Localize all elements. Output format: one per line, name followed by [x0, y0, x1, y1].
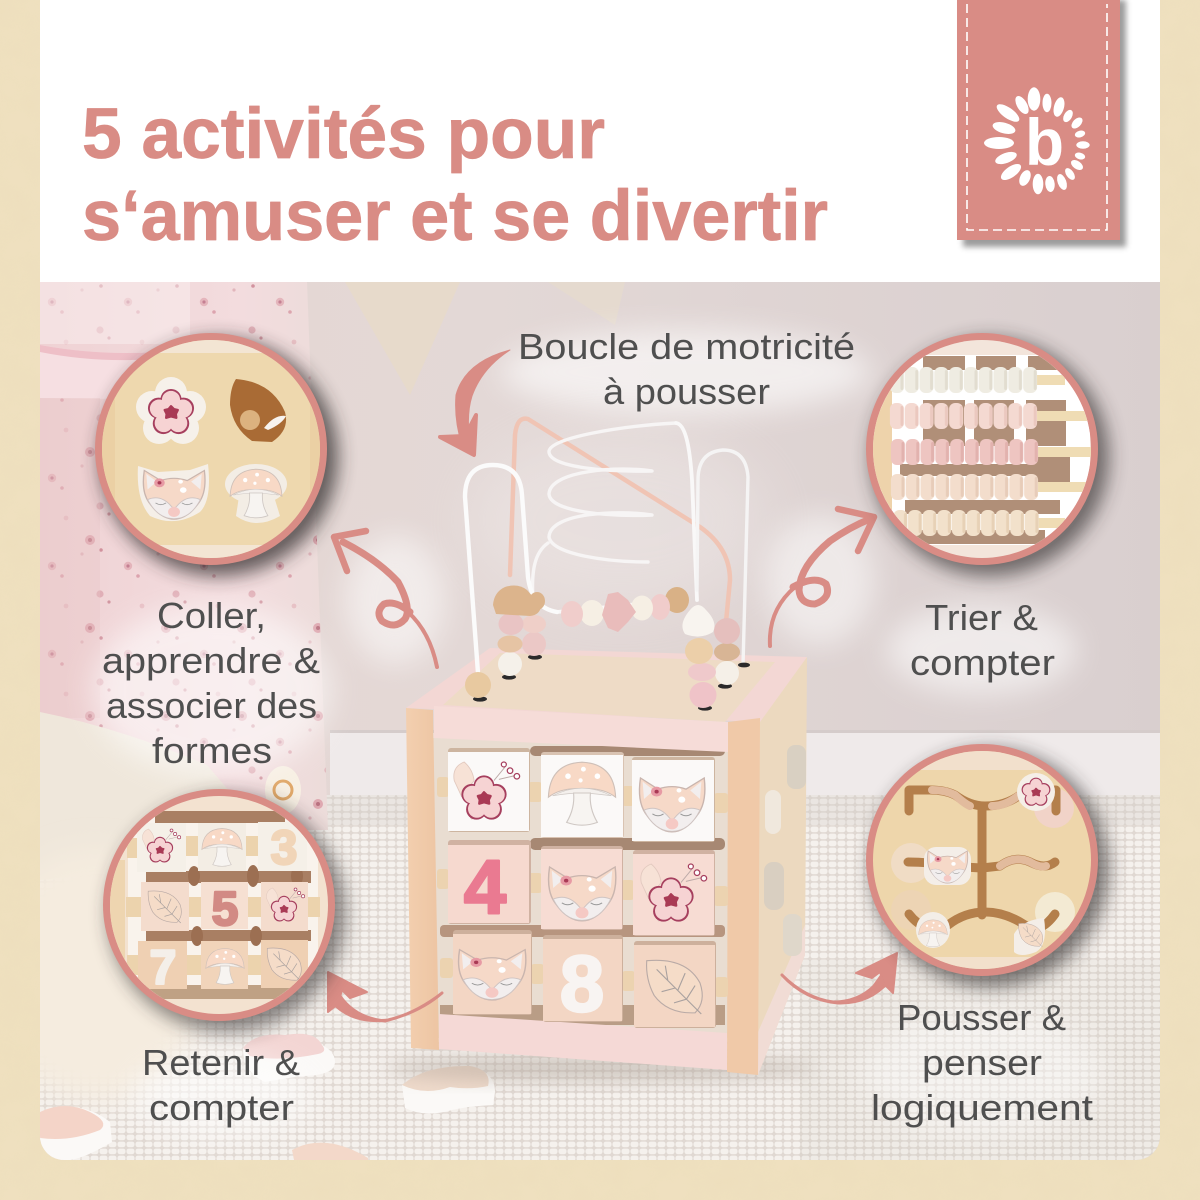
- label: Trier & compter: compter: [910, 642, 1055, 683]
- beads row 5: [893, 510, 1039, 536]
- blocks row 2: [448, 840, 715, 936]
- right bead stack: [682, 605, 740, 708]
- circle: abacus: [866, 333, 1109, 576]
- title: 5 activités pour: [82, 95, 605, 174]
- circle: sliding maze: [866, 744, 1109, 987]
- beads row 4: [890, 474, 1038, 500]
- toy: leaf piece on rug: [292, 1142, 368, 1160]
- title: s‘amuser et se divertir: [82, 177, 828, 256]
- product: activity cube: [385, 419, 815, 1082]
- label: Coller, apprendre & associer des formes: associer des: [106, 685, 317, 726]
- beads row 2: [890, 403, 1038, 429]
- circle: number blocks: 5: [212, 883, 238, 936]
- label: Pousser & penser logiquement: Pousser &: [897, 997, 1066, 1038]
- hole: leaf shape with knob: [230, 379, 286, 442]
- label: Retenir & compter: compter: [149, 1087, 294, 1128]
- label: Coller, apprendre & associer des formes: Coller,: [157, 595, 266, 636]
- label: Retenir & compter: Retenir &: [142, 1042, 300, 1083]
- icon: flower logo: [984, 87, 1090, 194]
- label: Trier & compter: Trier &: [925, 597, 1038, 638]
- circle: number blocks: 7: [150, 942, 176, 995]
- arrow: to bead loop: [440, 350, 510, 455]
- label: Trier & compter: [910, 597, 1055, 683]
- icon: flower logo: b: [1025, 105, 1064, 179]
- brand tag with logo: [957, 0, 1126, 247]
- piece: mushroom on maze: [916, 912, 950, 948]
- title: [82, 95, 828, 256]
- label: Pousser & penser logiquement: [871, 997, 1093, 1128]
- label: Boucle de motricité: [518, 326, 855, 412]
- label: Boucle de motricité: Boucle de motricité: [518, 326, 855, 367]
- piece: mushroom: [225, 464, 287, 523]
- white header band: [40, 0, 1160, 282]
- left bead stack: [465, 586, 546, 698]
- left post: [406, 708, 439, 1050]
- circle: number blocks: [103, 789, 346, 1032]
- bottom rail: [439, 1014, 727, 1070]
- photo background: room scene: [0, 282, 1160, 1165]
- label: Retenir & compter: [142, 1042, 300, 1128]
- soft glows behind labels and toy: [92, 330, 1102, 1135]
- pegs: [437, 777, 728, 997]
- circle: shape puzzle: [95, 333, 338, 576]
- label: Pousser & penser logiquement: penser: [922, 1042, 1042, 1083]
- bead maze wires: [465, 419, 748, 673]
- arrow: to abacus circle: [770, 509, 874, 646]
- beads row 1: [890, 367, 1038, 393]
- cube interior: [433, 738, 728, 1038]
- piece: fox: [138, 464, 209, 521]
- top rail: [434, 706, 728, 752]
- blocks row 3: 8: [560, 939, 604, 1028]
- toy: mushroom piece on rug: [402, 1066, 495, 1114]
- arrow: to blocks circle: [328, 972, 442, 1021]
- toy: flower piece on rug: [243, 1034, 335, 1082]
- blocks row 1: [448, 748, 715, 842]
- label: Boucle de motricité: à pousser: [603, 371, 770, 412]
- center beads: [561, 587, 689, 632]
- arrow: to maze circle: [782, 953, 897, 1003]
- circle: number blocks: 3: [271, 822, 297, 875]
- piece: flower on maze: [1017, 773, 1055, 811]
- label: Pousser & penser logiquement: logiquement: [871, 1087, 1093, 1128]
- cube top panel: [406, 648, 807, 722]
- piece: leaf on maze: [1014, 918, 1045, 955]
- maze grooves: [908, 790, 1056, 928]
- cube right side: [758, 657, 807, 1075]
- label: Coller, apprendre & associer des formes: formes: [152, 730, 272, 771]
- piece: flower: [136, 377, 206, 444]
- beads row 3: [890, 439, 1038, 465]
- blocks row 2: 4: [464, 845, 506, 930]
- label: Coller, apprendre & associer des formes: apprendre &: [102, 640, 320, 681]
- black feet: [473, 654, 750, 711]
- piece: fox on maze: [924, 847, 971, 885]
- label: Coller, apprendre & associer des formes: [102, 595, 320, 771]
- blocks row 3: [453, 930, 716, 1028]
- right post: [727, 718, 760, 1075]
- arrow: to shapes circle: [334, 531, 437, 667]
- toy: fox piece on rug: [40, 1106, 112, 1160]
